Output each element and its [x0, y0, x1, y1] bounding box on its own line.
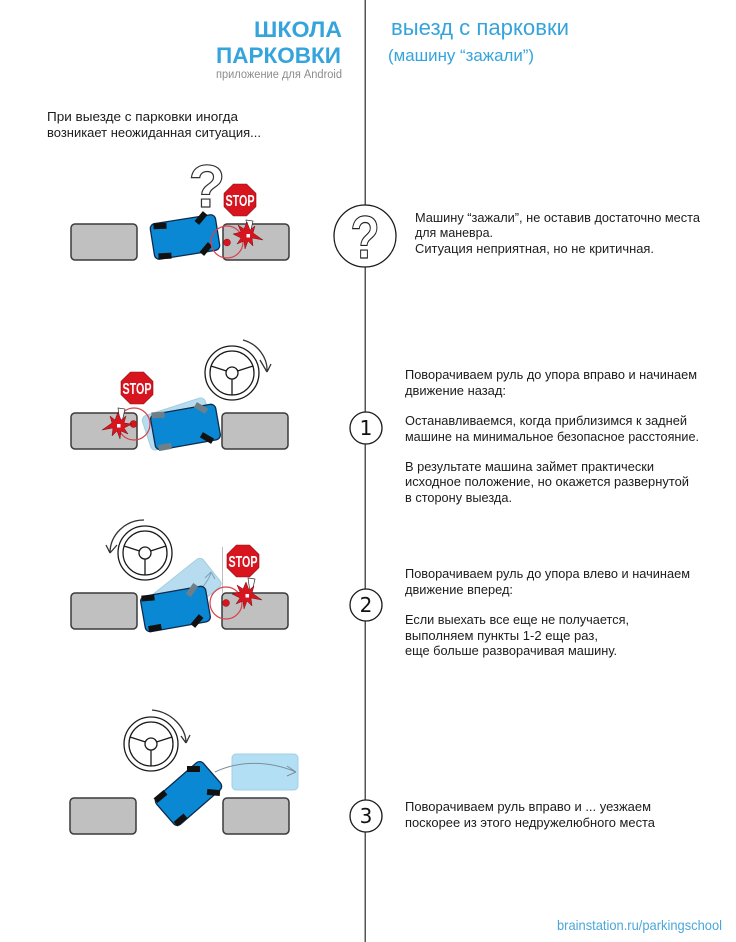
step number 1: 1 [360, 416, 372, 440]
text: step 3: Поворачиваем руль вправо и ... уезжаем [405, 800, 651, 814]
title: Школа парковки: ШКОЛА [254, 17, 342, 42]
text: step 2: Если выехать все еще не получается, [405, 613, 629, 627]
arrow: clockwise rotation [152, 710, 190, 743]
intro text [47, 110, 261, 140]
text: step 1: исходное положение, но окажется развернутой [405, 475, 689, 489]
title: Школа парковки [216, 17, 342, 81]
icon: steering wheel [205, 346, 259, 400]
panel: step 2 scene [71, 520, 288, 632]
text: step 1 [405, 368, 699, 505]
icon: stop sign [121, 372, 153, 404]
intro text: возникает неожиданная ситуация... [47, 126, 261, 140]
text: step 2: движение вперед: [405, 583, 513, 597]
text: step 3: поскорее из этого недружелюбного места [405, 816, 655, 830]
blue car [140, 583, 211, 632]
ghost car position [149, 556, 223, 626]
icon: stop sign [227, 545, 259, 577]
icon: stop sign [224, 184, 256, 216]
center divider line [364, 0, 366, 942]
parked car left [70, 798, 136, 834]
text: step 1: движение назад: [405, 384, 506, 398]
parked car right [223, 798, 289, 834]
panel: step 3 scene [70, 710, 298, 834]
heading: topic: (машину “зажали”) [388, 46, 534, 65]
parked car left [71, 593, 137, 629]
blue car [153, 760, 224, 827]
heading: topic: выезд с парковки [391, 15, 569, 40]
text: situation description [415, 211, 700, 256]
step number 3 [350, 800, 382, 832]
parked car right [222, 413, 288, 449]
icon: large question circle [334, 204, 396, 271]
step number 2: 2 [360, 593, 372, 617]
parked car left [71, 413, 137, 449]
text: step 1: В результате машина займет практически [405, 460, 654, 474]
text: step 1: Останавливаемся, когда приблизимся к задней [405, 414, 687, 428]
panel: situation scene [71, 153, 289, 260]
icon: large question circle: ? [350, 204, 380, 271]
step number 3: 3 [360, 804, 372, 828]
arrow: counterclockwise rotation [106, 520, 144, 553]
parked car right [223, 224, 289, 260]
icon: steering wheel [124, 717, 178, 771]
footer link text: brainstation.ru/parkingschool [557, 917, 722, 933]
text: situation description: для маневра. [415, 226, 493, 240]
text: step 2 [405, 567, 690, 658]
step number 1 [350, 412, 382, 444]
icon: question mark: ? [189, 153, 225, 220]
icon: stop sign: STOP [228, 554, 258, 571]
icon: steering wheel [118, 526, 172, 580]
collision marker [102, 408, 150, 440]
icon: stop sign: STOP [226, 193, 255, 210]
text: situation description: Машину “зажали”, не оставив достаточно места [415, 211, 700, 225]
text: step 1: машине на минимальное безопасное расстояние. [405, 430, 699, 444]
guide line [222, 547, 223, 593]
step number 2 [350, 589, 382, 621]
text: step 2: еще больше разворачивая машину. [405, 644, 617, 658]
text: step 2: выполняем пункты 1-2 еще раз, [405, 629, 598, 643]
title: Школа парковки: ПАРКОВКИ [216, 43, 341, 68]
intro text: При выезде с парковки иногда [47, 110, 238, 124]
icon: stop sign: STOP [122, 381, 152, 398]
collision marker [211, 220, 263, 258]
text: step 1: Поворачиваем руль до упора вправо и начинаем [405, 368, 697, 382]
text: situation description: Ситуация неприятная, но не критичная. [415, 242, 654, 256]
arrow: exit path [215, 763, 296, 776]
text: step 3 [405, 800, 655, 830]
parked car right [222, 593, 288, 629]
ghost car position [141, 397, 215, 451]
parked car left [71, 224, 137, 260]
collision marker [210, 578, 262, 619]
panel: step 1 scene [71, 340, 288, 451]
title: Школа парковки: приложение для Android [216, 69, 342, 81]
heading: topic [388, 15, 569, 65]
blue car [150, 211, 220, 260]
target position [232, 754, 298, 790]
text: step 1: в сторону выезда. [405, 491, 512, 505]
arrow: forward path [201, 572, 215, 590]
blue car [150, 402, 221, 451]
text: step 2: Поворачиваем руль до упора влево и начинаем [405, 567, 690, 581]
arrow: clockwise rotation [243, 340, 271, 372]
